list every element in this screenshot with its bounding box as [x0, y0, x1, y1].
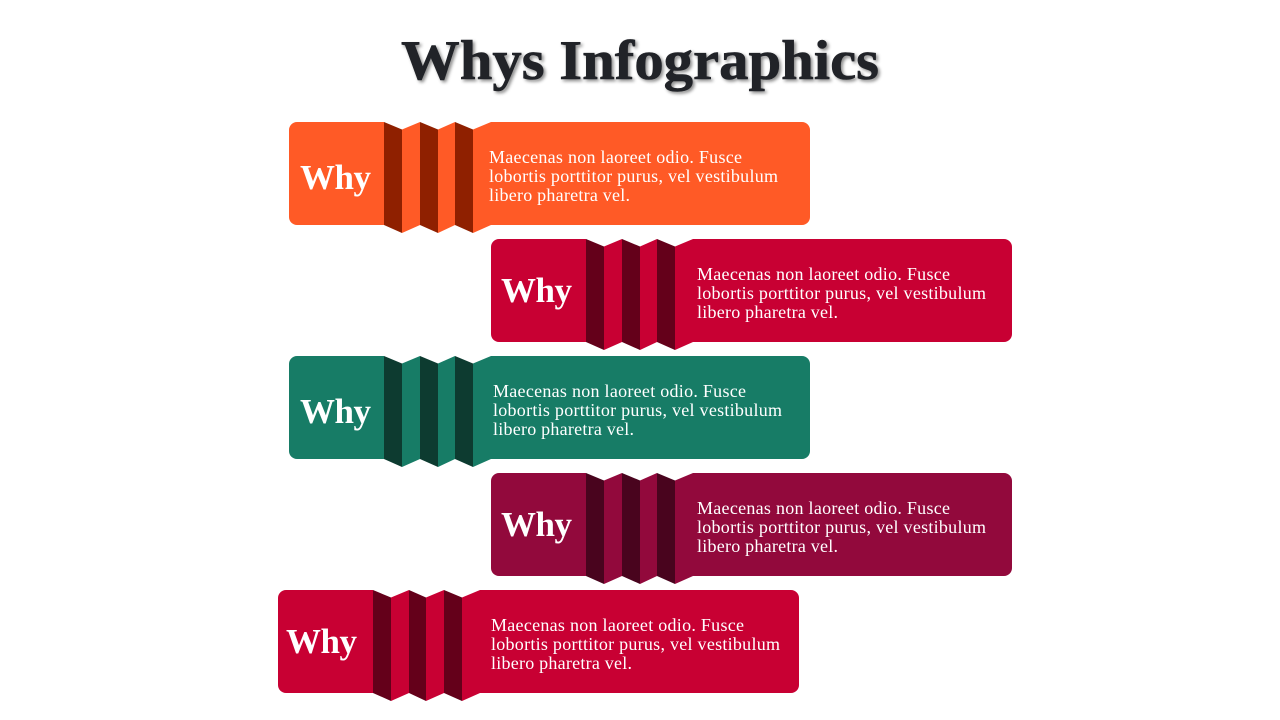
- folded ribbon: [586, 473, 693, 584]
- why label: Why: [286, 622, 358, 661]
- left label block: [289, 356, 384, 459]
- description: Maecenas non laoreet odio. Fusce: [697, 498, 950, 518]
- description: libero pharetra vel.: [697, 536, 838, 556]
- why label: Why: [300, 392, 372, 431]
- left label block: [491, 473, 586, 576]
- description: lobortis porttitor purus, vel vestibulum: [491, 634, 780, 654]
- panel: why row 4 plum: [491, 473, 1012, 584]
- description: [493, 381, 782, 439]
- description: Maecenas non laoreet odio. Fusce: [697, 264, 950, 284]
- description: Maecenas non laoreet odio. Fusce: [489, 147, 742, 167]
- folded ribbon: [384, 122, 491, 233]
- description: [489, 147, 778, 205]
- description: [697, 264, 986, 322]
- left label block: [289, 122, 384, 225]
- left label block: [491, 239, 586, 342]
- left label block: [278, 590, 373, 693]
- description: libero pharetra vel.: [493, 419, 634, 439]
- description: libero pharetra vel.: [491, 653, 632, 673]
- why label: Why: [300, 158, 372, 197]
- panel: why row 2 red: [491, 239, 1012, 350]
- description: lobortis porttitor purus, vel vestibulum: [489, 166, 778, 186]
- why label: Why: [501, 271, 572, 310]
- description: libero pharetra vel.: [489, 185, 630, 205]
- description: Maecenas non laoreet odio. Fusce: [493, 381, 746, 401]
- panel: why row 5 red: [278, 590, 799, 701]
- description: libero pharetra vel.: [697, 302, 838, 322]
- text body block: [693, 473, 1012, 576]
- text body block: [491, 122, 810, 225]
- folded ribbon: [586, 239, 693, 350]
- title: Whys Infographics: [401, 30, 879, 92]
- description: [491, 615, 780, 673]
- description: lobortis porttitor purus, vel vestibulum: [697, 283, 986, 303]
- why label: Why: [501, 505, 572, 544]
- description: lobortis porttitor purus, vel vestibulum: [493, 400, 782, 420]
- folded ribbon: [384, 356, 491, 467]
- description: [697, 498, 986, 556]
- panel: why row 3 green: [289, 356, 810, 467]
- folded ribbon: [373, 590, 480, 701]
- text body block: [491, 356, 810, 459]
- text body block: [480, 590, 799, 693]
- description: Maecenas non laoreet odio. Fusce: [491, 615, 744, 635]
- panel: why row 1 orange: [289, 122, 810, 233]
- description: lobortis porttitor purus, vel vestibulum: [697, 517, 986, 537]
- text body block: [693, 239, 1012, 342]
